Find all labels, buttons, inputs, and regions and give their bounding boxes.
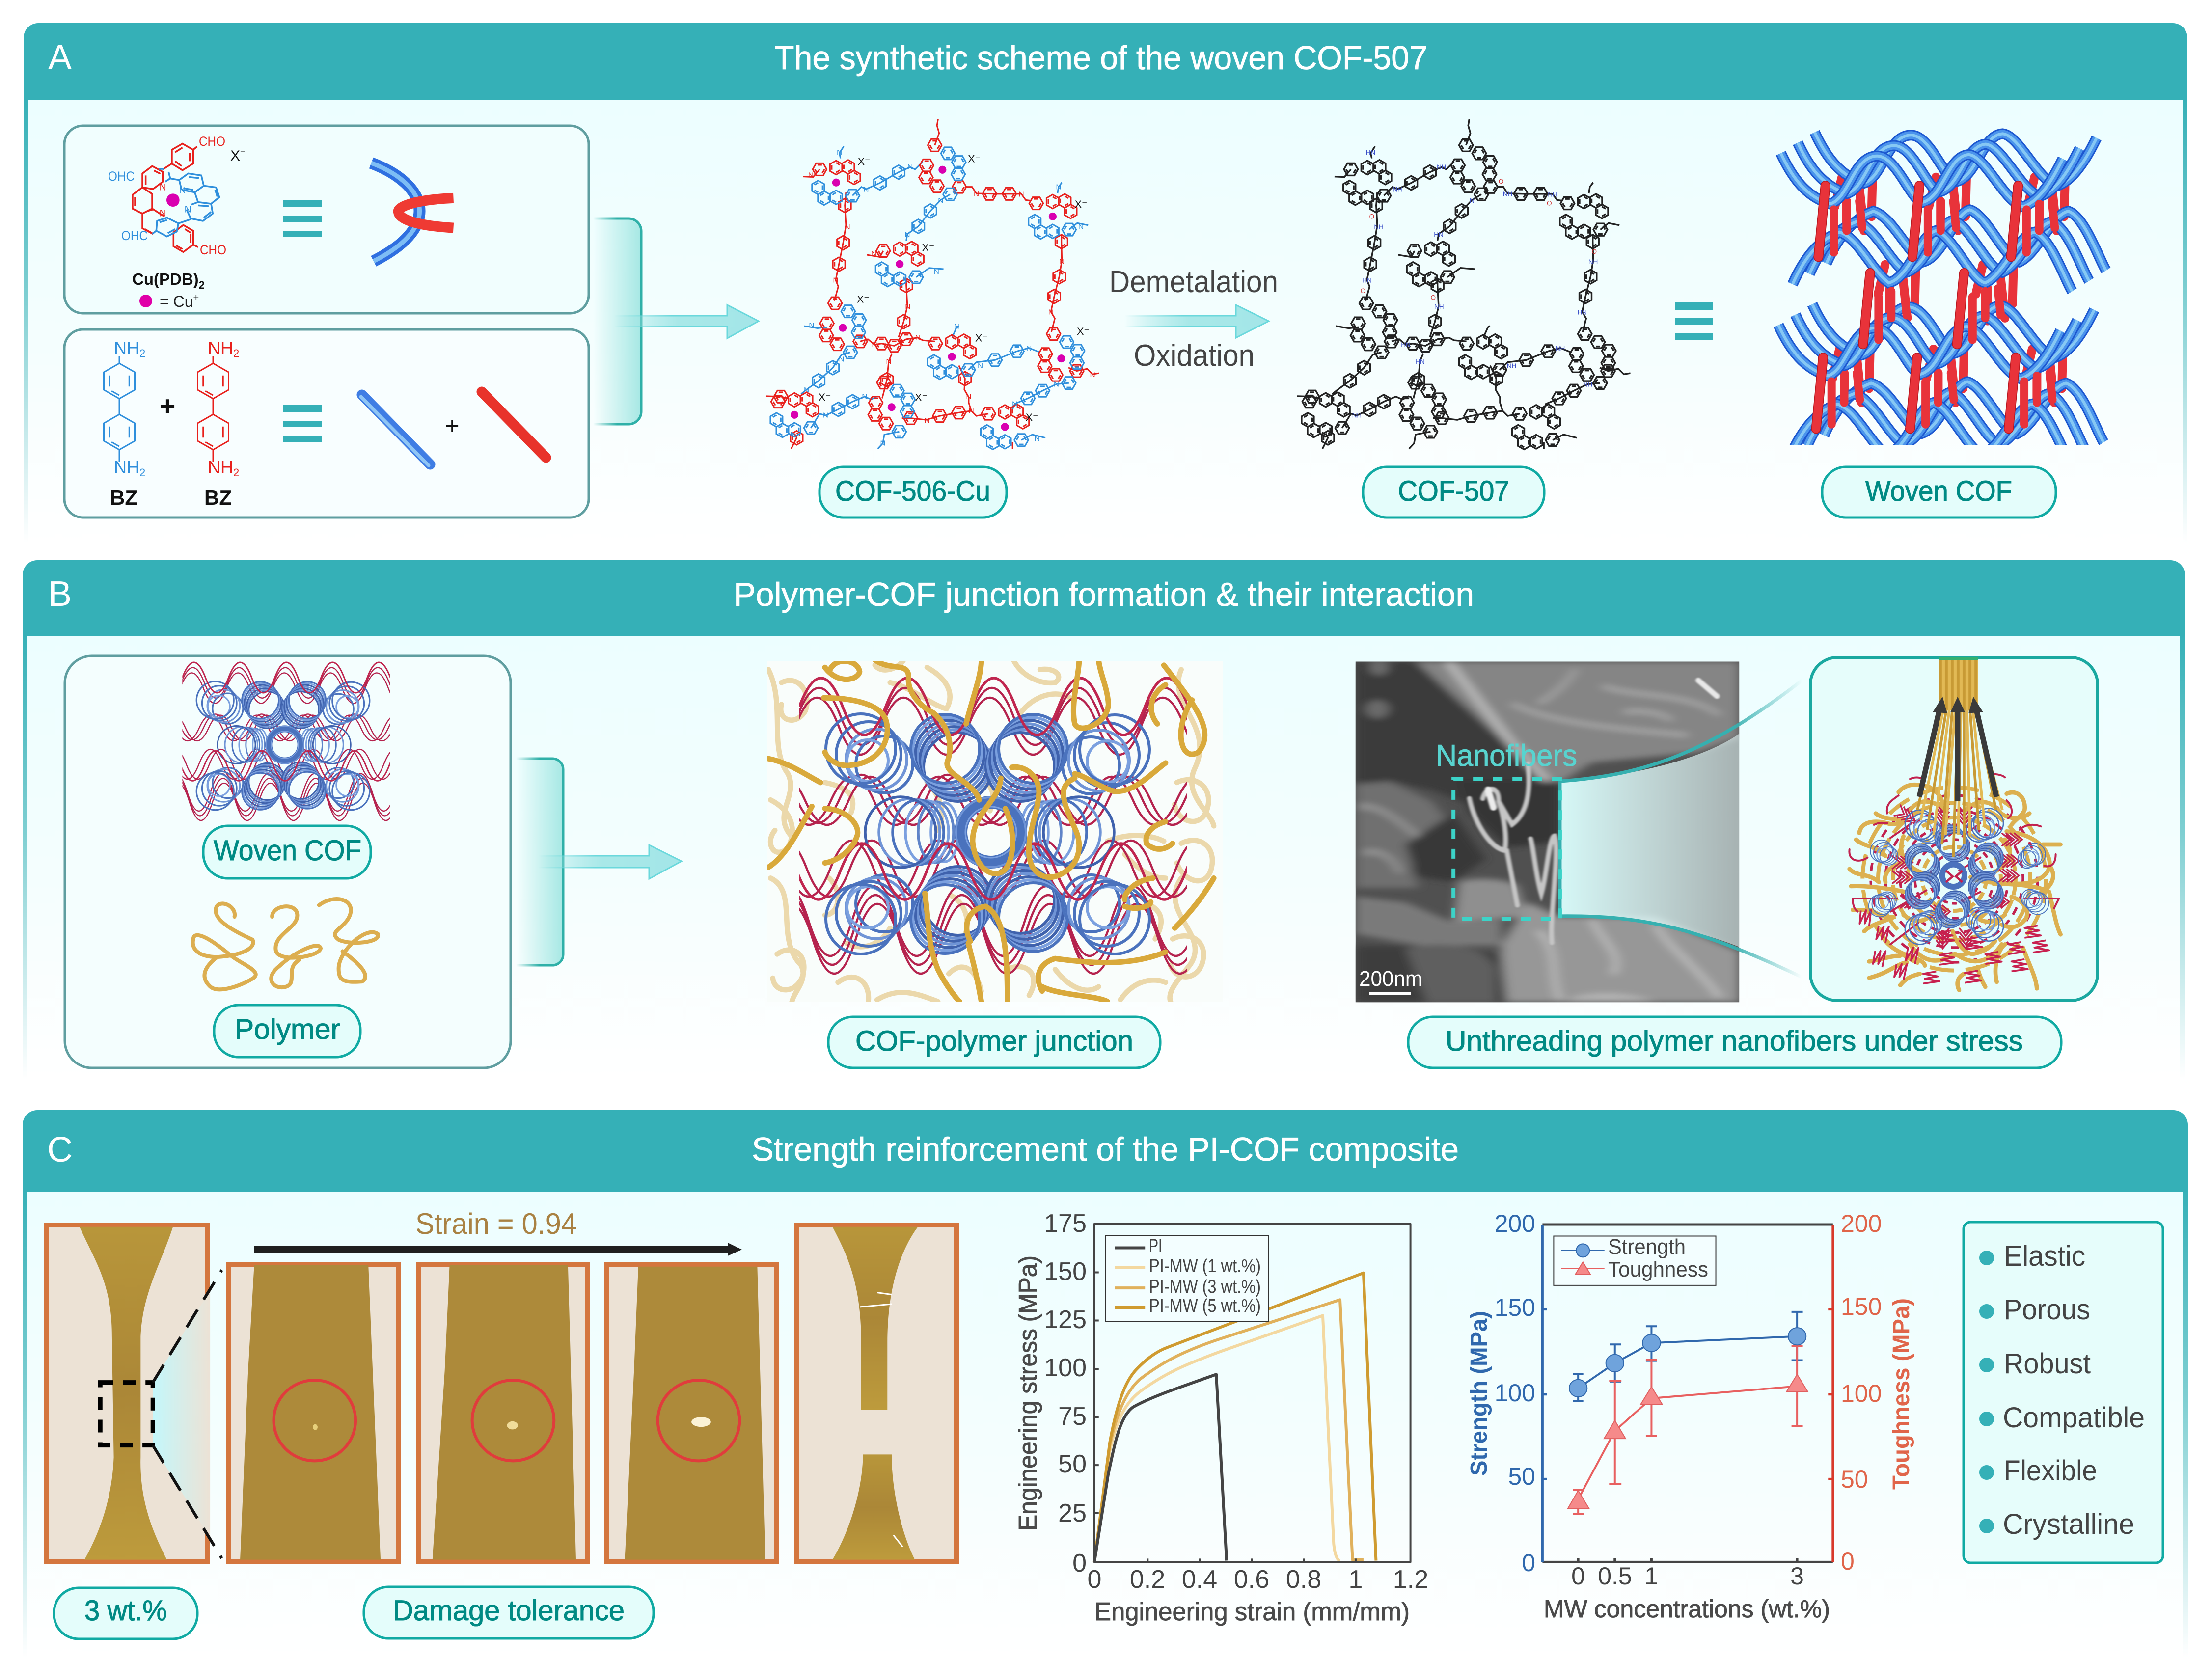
amide labels: O bbox=[1431, 294, 1436, 301]
right axis title: Toughness (MPa) bbox=[1888, 1298, 1914, 1490]
item: Compatible: Compatible bbox=[2003, 1402, 2145, 1434]
network labels: N bbox=[871, 249, 876, 258]
x tick labels bbox=[1571, 1562, 1804, 1590]
label: NH2 blue bottom: 2 bbox=[139, 466, 145, 479]
molecule: Cu(PDB)2 structure: N bbox=[160, 182, 166, 192]
network labels: N bbox=[974, 190, 979, 198]
amide labels: NH bbox=[1583, 381, 1592, 388]
network labels: N bbox=[833, 276, 838, 285]
panel letter A: A bbox=[48, 38, 72, 77]
icon: blue rod bbox=[361, 395, 430, 465]
item: Elastic: Elastic bbox=[2004, 1240, 2085, 1272]
bold outer polymer bbox=[1850, 785, 2061, 990]
amide labels: O bbox=[1592, 248, 1597, 255]
network labels: N bbox=[823, 411, 828, 420]
pill: Woven COF: Woven COF bbox=[1865, 475, 2012, 507]
bracket joining precursors bbox=[593, 218, 641, 424]
amide labels bbox=[1352, 149, 1598, 419]
photo: initial notch bbox=[228, 1265, 398, 1561]
photo: hole growing bbox=[418, 1265, 588, 1561]
chart: stress-strain curves bbox=[1014, 1209, 1428, 1626]
network labels: N bbox=[880, 439, 885, 447]
network labels bbox=[804, 148, 1095, 447]
label: Nanofibers: Nanofibers bbox=[1436, 739, 1577, 773]
box: unthreading illustration bbox=[1810, 657, 2098, 1001]
network labels: N bbox=[1054, 380, 1059, 388]
x tick labels: 0.4 bbox=[1182, 1565, 1217, 1594]
label: BZ red: BZ bbox=[204, 486, 232, 509]
amide labels: O bbox=[1361, 287, 1365, 295]
network labels: N bbox=[808, 171, 814, 179]
network labels: X⁻ bbox=[968, 153, 981, 165]
panel A body bbox=[24, 93, 2187, 543]
box: Cu(PDB)2 precursor bbox=[64, 126, 589, 313]
panel B left edge bbox=[23, 633, 27, 1079]
network labels: N bbox=[1019, 191, 1024, 199]
amide labels: HN bbox=[1578, 308, 1587, 316]
icon: polymer chains bbox=[193, 899, 378, 989]
zoom callout lines bbox=[100, 1270, 222, 1558]
label: NH2 red top: NH bbox=[208, 338, 233, 358]
panel C: strength reinforcement bbox=[23, 1110, 2188, 1658]
network labels: N bbox=[915, 334, 921, 342]
amide labels: O bbox=[1369, 213, 1374, 220]
panel B header bbox=[23, 560, 2185, 636]
x tick labels: 0.8 bbox=[1286, 1565, 1321, 1594]
network labels: N bbox=[862, 392, 867, 401]
left axis tick labels: 150 bbox=[1495, 1294, 1535, 1321]
pill: 3 wt.%: 3 wt.% bbox=[84, 1595, 167, 1627]
woven COF illustration bbox=[1778, 133, 2106, 463]
legend labels bbox=[1608, 1235, 1708, 1281]
panel B body bbox=[23, 628, 2185, 1079]
network labels: N bbox=[938, 196, 943, 205]
amide labels: HN bbox=[1362, 277, 1372, 284]
pill: Polymer: Polymer bbox=[235, 1013, 340, 1045]
network labels: N bbox=[809, 321, 814, 329]
network labels: N bbox=[839, 355, 844, 363]
x tick labels: 0.5 bbox=[1598, 1562, 1632, 1590]
label: Oxidation: Oxidation bbox=[1134, 339, 1255, 373]
legend labels: PI-MW (5 wt.%) bbox=[1149, 1296, 1261, 1316]
network labels: N bbox=[1035, 435, 1040, 443]
pill: 3 wt.% bbox=[54, 1588, 197, 1639]
arrow to COF-506-Cu bbox=[614, 305, 759, 338]
legend labels: PI-MW (3 wt.%) bbox=[1149, 1277, 1261, 1297]
amide labels: NH bbox=[1434, 303, 1444, 310]
label: equals Cu+: + bbox=[193, 293, 199, 303]
network labels: N bbox=[907, 163, 913, 171]
left axis tick labels bbox=[1495, 1210, 1535, 1577]
label: 200nm scale bar: 200nm bbox=[1359, 967, 1422, 991]
panel A left edge bbox=[24, 98, 28, 543]
x tick labels: 3 bbox=[1790, 1562, 1804, 1590]
chart: strength and toughness bbox=[1466, 1210, 1914, 1623]
item: Porous: Porous bbox=[2004, 1294, 2090, 1326]
panel B right edge bbox=[2180, 633, 2185, 1079]
equals sign bbox=[1675, 302, 1713, 340]
network labels: X⁻ bbox=[915, 392, 928, 404]
panel C body bbox=[23, 1183, 2188, 1658]
network labels: N bbox=[934, 268, 939, 276]
pill: COF-507 bbox=[1363, 467, 1544, 517]
amide labels: NH bbox=[1374, 223, 1384, 231]
y tick labels: 25 bbox=[1058, 1499, 1087, 1527]
network labels: N bbox=[905, 302, 910, 311]
panel C header bbox=[23, 1110, 2188, 1192]
right axis tick labels: 100 bbox=[1841, 1380, 1882, 1407]
y tick labels: 175 bbox=[1044, 1209, 1087, 1238]
x tick labels: 1 bbox=[1644, 1562, 1658, 1590]
panel A: synthetic scheme bbox=[24, 23, 2187, 543]
legend labels: Toughness bbox=[1608, 1257, 1708, 1281]
network labels: X⁻ bbox=[1075, 198, 1087, 210]
network labels: N bbox=[1090, 371, 1095, 379]
amide labels: HN bbox=[1366, 149, 1375, 156]
icon: blue and red hairpin bbox=[371, 163, 454, 261]
pill: COF-506-Cu: COF-506-Cu bbox=[835, 475, 990, 507]
y tick labels bbox=[1044, 1209, 1087, 1578]
legend labels bbox=[1149, 1236, 1261, 1316]
x tick labels: 1.2 bbox=[1393, 1565, 1428, 1594]
box: BZ linkers bbox=[64, 329, 589, 517]
pill: Woven COF bbox=[1822, 467, 2056, 517]
x axis title: MW concentrations (wt.%) bbox=[1544, 1595, 1830, 1623]
label: X anion: X bbox=[230, 148, 240, 164]
network labels: X⁻ bbox=[922, 242, 934, 253]
label: Cu(PDB)2: 2 bbox=[199, 279, 205, 291]
pale polymer background bbox=[768, 661, 1214, 1017]
network labels: N bbox=[954, 322, 959, 330]
pill: Woven COF: Woven COF bbox=[214, 835, 361, 867]
photo: fractured specimen bbox=[796, 1225, 956, 1561]
label: OHC lower: OHC bbox=[121, 228, 148, 243]
amide labels: HN bbox=[1401, 341, 1411, 349]
right axis tick labels: 0 bbox=[1841, 1548, 1855, 1575]
legend labels: Strength bbox=[1608, 1235, 1686, 1259]
label: CHO top: CHO bbox=[199, 134, 225, 149]
pill: Polymer bbox=[214, 1005, 360, 1057]
icon: copper dot bbox=[139, 295, 152, 307]
amide labels: O bbox=[1499, 178, 1503, 185]
panel A right edge bbox=[2183, 98, 2187, 543]
item: Crystalline: Crystalline bbox=[2003, 1508, 2134, 1540]
equals sign bbox=[283, 405, 322, 442]
amide labels: HN bbox=[1415, 358, 1425, 365]
label: BZ blue: BZ bbox=[110, 486, 137, 509]
x tick labels: 0 bbox=[1571, 1562, 1585, 1590]
y tick labels: 75 bbox=[1058, 1402, 1087, 1431]
network labels: N bbox=[886, 357, 891, 366]
network labels: N bbox=[966, 393, 971, 401]
pill: Damage tolerance bbox=[364, 1587, 654, 1638]
amide labels: NH bbox=[1503, 191, 1512, 198]
network labels: X⁻ bbox=[819, 391, 831, 403]
molecule: Cu(PDB)2 structure: N bbox=[179, 185, 186, 195]
pill: COF-polymer junction: COF-polymer junction bbox=[855, 1025, 1133, 1057]
amide labels: NH bbox=[1393, 186, 1402, 193]
legend labels: PI-MW (1 wt.%) bbox=[1149, 1256, 1261, 1277]
panel C title: Strength reinforcement of the PI-COF composite bbox=[752, 1131, 1459, 1168]
right axis tick labels bbox=[1841, 1210, 1882, 1575]
COF-507 network bbox=[1297, 119, 1631, 449]
y tick labels: 0 bbox=[1072, 1549, 1087, 1578]
red linkages bbox=[1849, 774, 2059, 944]
item: Robust: Robust bbox=[2004, 1348, 2091, 1380]
molecule: red BZ bbox=[197, 356, 229, 462]
legend labels: PI bbox=[1149, 1236, 1162, 1256]
network labels: X⁻ bbox=[975, 332, 988, 344]
label: Strain = 0.94: Strain = 0.94 bbox=[415, 1207, 577, 1240]
network labels: N bbox=[904, 230, 910, 239]
pill: COF-506-Cu bbox=[819, 467, 1007, 517]
bracket joining inputs bbox=[516, 759, 563, 965]
left axis tick labels: 0 bbox=[1522, 1549, 1535, 1577]
plot area curves bbox=[1094, 1224, 1411, 1562]
yellow fibers pulled out bbox=[1917, 657, 2002, 857]
x axis title: Engineering strain (mm/mm) bbox=[1094, 1598, 1410, 1626]
label: NH2 red bottom: NH bbox=[208, 457, 233, 477]
network labels: N bbox=[872, 341, 877, 349]
panel letter B: B bbox=[48, 574, 72, 614]
illustration: COF-polymer junction bbox=[767, 661, 1223, 1002]
label: equals Cu+: = Cu bbox=[160, 293, 193, 310]
molecule: Cu(PDB)2 structure: N bbox=[185, 205, 191, 215]
x tick labels: 0 bbox=[1088, 1565, 1101, 1594]
x tick labels: 0.6 bbox=[1234, 1565, 1269, 1594]
network labels: N bbox=[804, 386, 809, 394]
label: NH2 blue top: 2 bbox=[139, 347, 145, 359]
SEM image of nanofibers bbox=[1356, 659, 1802, 1002]
pill: COF-507: COF-507 bbox=[1398, 475, 1509, 507]
network labels: N bbox=[978, 362, 983, 370]
panel letter C: C bbox=[47, 1130, 73, 1170]
panel C left edge bbox=[23, 1188, 27, 1658]
label: X anion: − bbox=[240, 147, 246, 157]
icon: red rod bbox=[482, 392, 546, 458]
plus sign: + bbox=[160, 390, 175, 421]
left axis tick labels: 200 bbox=[1495, 1210, 1535, 1237]
label: NH2 red top: 2 bbox=[233, 347, 239, 359]
left axis tick labels: 100 bbox=[1495, 1379, 1535, 1407]
network labels: N bbox=[845, 223, 850, 231]
label: Demetalation: Demetalation bbox=[1109, 265, 1278, 299]
amide labels: NH bbox=[1507, 362, 1516, 370]
amide labels: O bbox=[1547, 200, 1552, 207]
stress arrows bbox=[1919, 697, 1996, 801]
network labels: N bbox=[837, 148, 842, 157]
arrow: demetalation oxidation bbox=[1124, 305, 1269, 338]
panel C right edge bbox=[2183, 1188, 2188, 1658]
amide labels: N bbox=[1470, 197, 1475, 204]
amide labels: NH bbox=[1588, 258, 1598, 266]
amide labels: NH bbox=[1548, 191, 1557, 198]
box: woven COF and polymer bbox=[65, 656, 511, 1068]
x tick labels: 0.2 bbox=[1130, 1565, 1165, 1594]
x tick labels: 1 bbox=[1349, 1565, 1363, 1594]
label: NH2 blue top: NH bbox=[114, 338, 139, 358]
label: Cu(PDB)2: Cu(PDB) bbox=[132, 270, 199, 288]
network labels: N bbox=[864, 185, 869, 193]
panel B: junction formation bbox=[23, 560, 2185, 1079]
photo: hole larger bbox=[604, 1262, 779, 1561]
dense fill strands bbox=[1862, 787, 2046, 971]
network labels: N bbox=[1056, 183, 1061, 191]
pill: Woven COF bbox=[203, 826, 371, 878]
label: CHO bottom: CHO bbox=[200, 243, 226, 257]
y tick labels: 125 bbox=[1044, 1306, 1087, 1334]
pill: COF-polymer junction bbox=[828, 1017, 1160, 1068]
icon: woven COF small bbox=[153, 662, 417, 820]
photo: dogbone specimen bbox=[47, 1225, 208, 1561]
amide labels: HN bbox=[1434, 231, 1444, 238]
panel A header bbox=[24, 23, 2187, 100]
COF-506-Cu network bbox=[766, 119, 1099, 449]
blue coils bbox=[1869, 809, 2048, 944]
plus sign: + bbox=[445, 412, 460, 439]
network labels: N bbox=[1078, 222, 1084, 231]
network labels: X⁻ bbox=[858, 156, 870, 167]
network labels: X⁻ bbox=[1026, 411, 1038, 423]
right axis tick labels: 200 bbox=[1841, 1210, 1882, 1237]
amide labels: NH bbox=[1437, 163, 1446, 171]
nanofiber strands bbox=[1470, 681, 1717, 943]
panel A title: The synthetic scheme of the woven COF-507 bbox=[774, 39, 1427, 77]
network labels: N bbox=[969, 407, 974, 415]
equals sign bbox=[283, 200, 322, 237]
amide labels: NH bbox=[1556, 345, 1565, 352]
pill: Unthreading polymer nanofibers under stress: Unthreading polymer nanofibers under stress bbox=[1446, 1025, 2023, 1057]
network labels: N bbox=[1059, 258, 1065, 266]
molecule: blue BZ bbox=[104, 356, 135, 462]
molecule: Cu(PDB)2 structure bbox=[133, 144, 219, 252]
right axis tick labels: 50 bbox=[1841, 1466, 1868, 1493]
molecule: Cu(PDB)2 structure: N bbox=[160, 209, 166, 219]
arrow to junction bbox=[538, 845, 682, 879]
label: NH2 blue bottom: NH bbox=[114, 457, 139, 477]
network labels: X⁻ bbox=[1077, 326, 1090, 337]
network labels: X⁻ bbox=[857, 293, 870, 305]
bold polymer strands bbox=[768, 660, 1214, 1002]
zoom-out funnel bbox=[1560, 734, 1739, 947]
box: property list bbox=[1964, 1222, 2163, 1563]
network labels: N bbox=[925, 416, 930, 425]
plot marks bbox=[1542, 1225, 1833, 1562]
network labels: N bbox=[1012, 400, 1017, 408]
y tick labels: 100 bbox=[1044, 1354, 1087, 1382]
pill: Damage tolerance: Damage tolerance bbox=[393, 1595, 625, 1627]
arrow: increasing strain bbox=[254, 1243, 742, 1256]
label: OHC upper: OHC bbox=[108, 169, 135, 184]
pill: Unthreading polymer nanofibers under stress bbox=[1408, 1017, 2061, 1068]
amide labels: NH bbox=[1352, 412, 1362, 419]
y tick labels: 150 bbox=[1044, 1257, 1087, 1286]
label: NH2 red bottom: 2 bbox=[233, 466, 239, 479]
network labels: N bbox=[1048, 308, 1054, 316]
y axis title: Engineering stress (MPa) bbox=[1014, 1255, 1042, 1531]
left axis title: Strength (MPa) bbox=[1466, 1311, 1492, 1476]
network labels: N bbox=[1026, 344, 1032, 353]
right axis tick labels: 150 bbox=[1841, 1293, 1882, 1320]
x tick labels bbox=[1088, 1565, 1428, 1594]
y tick labels: 50 bbox=[1058, 1450, 1087, 1478]
left axis tick labels: 50 bbox=[1508, 1463, 1535, 1490]
polymer COF ball bbox=[1849, 774, 2061, 990]
panel B title: Polymer-COF junction formation & their interaction bbox=[734, 576, 1474, 613]
item: Flexible: Flexible bbox=[2004, 1455, 2097, 1487]
